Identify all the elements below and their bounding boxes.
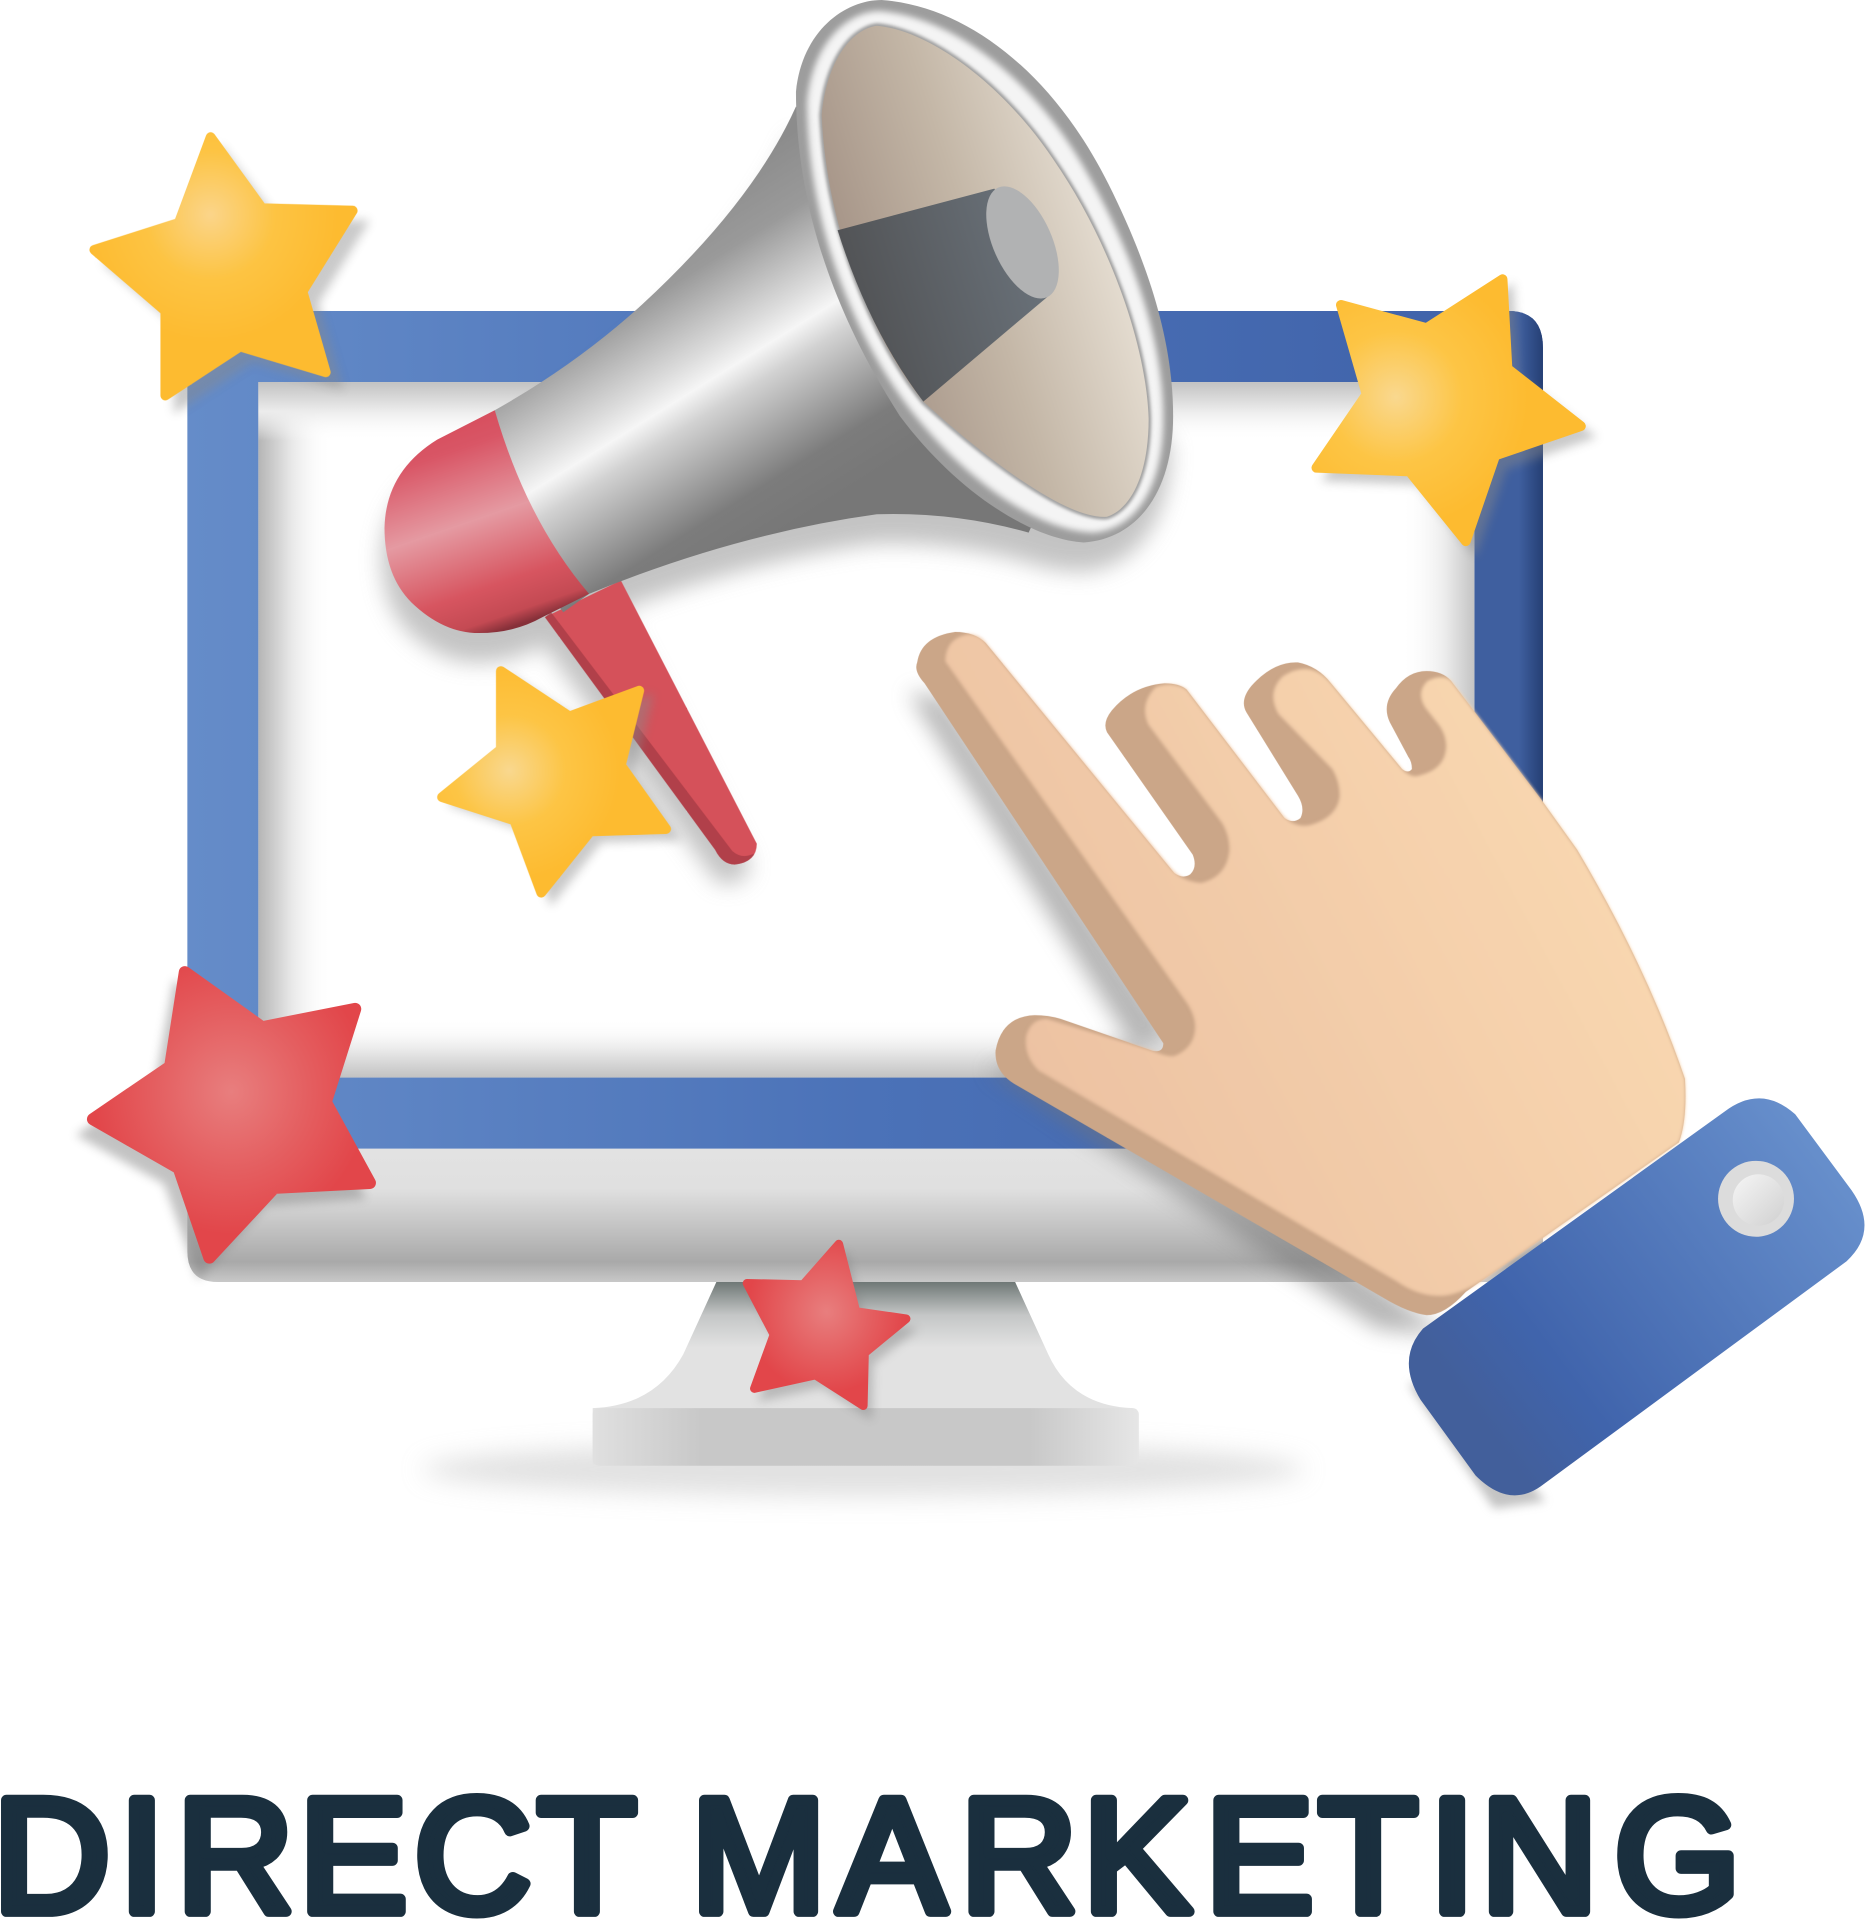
megaphone light ring: [807, 11, 1163, 533]
frame right edge: [1474, 311, 1543, 1078]
star: red left: [76, 972, 370, 1280]
monitor chin: [187, 1149, 1543, 1282]
hand shadow: [909, 692, 1445, 1335]
cuff body: [1409, 1098, 1864, 1495]
megaphone handle: [545, 580, 757, 864]
star: yellow top left: [94, 137, 370, 414]
monitor frame: [187, 311, 1543, 1149]
shirt cuff: [1408, 1098, 1864, 1509]
hand top surface: [945, 634, 1686, 1296]
speaker cap: [971, 176, 1074, 309]
floor shadow: [422, 1442, 1304, 1496]
monitor stand: [593, 1282, 1133, 1464]
megaphone outer ring: [796, 0, 1173, 542]
hand side wall: [916, 632, 1686, 1315]
megaphone inner cone: [822, 26, 1149, 517]
monitor base: [593, 1408, 1139, 1466]
pointing hand: [909, 632, 1686, 1335]
star: yellow centre: [442, 671, 681, 906]
megaphone red cap: [385, 410, 589, 633]
monitor: [187, 311, 1543, 1496]
cuff button: [1718, 1161, 1794, 1237]
star: red bottom: [747, 1244, 918, 1420]
screen: [258, 382, 1474, 1078]
ring inner edge: [822, 26, 1149, 517]
megaphone shadow: [382, 136, 1171, 884]
megaphone horn: [471, 107, 1102, 612]
star: yellow top right: [1316, 279, 1597, 557]
speaker cylinder: [838, 189, 1049, 402]
cuff shadow: [1408, 1384, 1545, 1509]
handle dark edge: [545, 612, 754, 864]
megaphone: [382, 0, 1173, 884]
